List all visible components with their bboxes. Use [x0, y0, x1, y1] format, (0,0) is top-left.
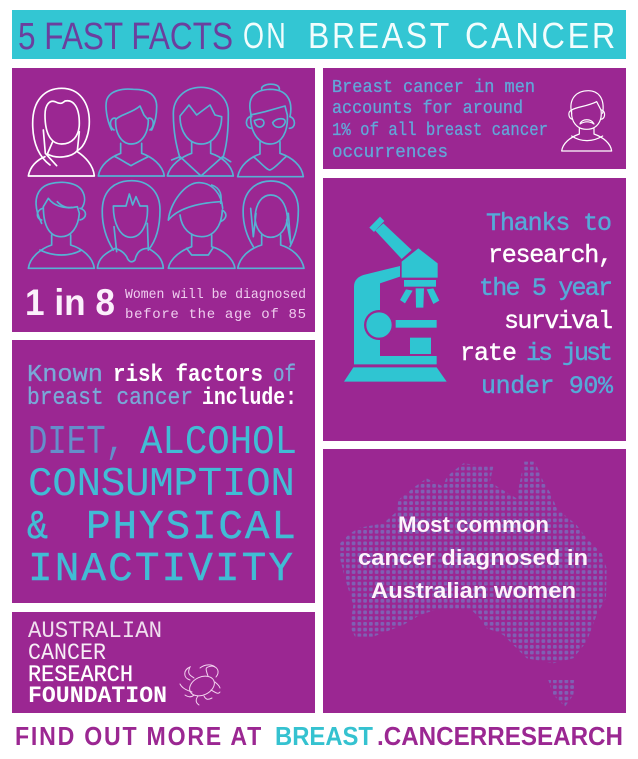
logo wordmark: CANCER [28, 640, 106, 666]
logo wordmark: RESEARCH [28, 662, 133, 688]
caption: women diagnosed [125, 287, 306, 323]
title: on breast cancer [243, 15, 618, 56]
text: survival rate: survival [504, 307, 613, 336]
logo wordmark: FOUNDATION [28, 683, 167, 709]
header banner [12, 10, 626, 59]
icon: microscope [344, 217, 447, 382]
list of risk factors [27, 420, 297, 593]
text: men statistic: occurrences [332, 143, 448, 163]
heading: known risk factors: include: [202, 385, 297, 412]
icon: woman 2 [98, 89, 164, 176]
icon: crab [180, 665, 220, 705]
map: dotted Australia [340, 462, 607, 706]
title: 5 fast facts: 5 FAST FACTS [18, 16, 233, 58]
text: men statistic: 1% of all breast cancer [332, 121, 548, 141]
title: on breast cancer: BREAST [308, 15, 452, 56]
list of risk factors: ALCOHOL [140, 420, 297, 466]
text: survival rate [460, 209, 614, 401]
text: men statistic [332, 78, 548, 163]
list of risk factors: CONSUMPTION [28, 462, 295, 508]
panel: foundation logo [12, 612, 315, 713]
heading: known risk factors [27, 362, 297, 412]
text: survival rate: Thanks to [486, 209, 612, 238]
icon: woman 3 [167, 87, 233, 176]
list of risk factors: PHYSICAL [86, 505, 296, 551]
text: most common cancer: Most common [398, 512, 549, 537]
heading: known risk factors: Known [27, 362, 103, 389]
footer: call to action [15, 721, 623, 751]
icon: woman 4 [238, 84, 303, 177]
heading: known risk factors: risk factors [113, 362, 263, 389]
text: survival rate: under 90% [481, 372, 614, 401]
panel: 1 in 8 women [12, 68, 315, 332]
footer: call to action: .CANCERRESEARCH [377, 721, 623, 751]
icon: woman 6 [97, 181, 163, 268]
panel: risk factors [12, 340, 315, 603]
text: survival rate: research, [488, 241, 613, 270]
icon: man with moustache [562, 91, 612, 151]
icon: row of women [28, 84, 304, 268]
logo wordmark [28, 618, 167, 709]
icon: woman 5 [28, 182, 94, 268]
list of risk factors: INACTIVITY [28, 547, 293, 593]
title: on breast cancer: ON [243, 15, 288, 56]
icon: woman 8 [238, 181, 304, 268]
stat: 1 in 8: 1 in 8 [25, 282, 115, 323]
caption: women diagnosed: before the age of 85 [125, 307, 306, 323]
title: on breast cancer: CANCER [465, 15, 618, 56]
icon: highlighted woman [28, 88, 94, 176]
logo wordmark: AUSTRALIAN [28, 618, 162, 644]
list of risk factors: & [27, 505, 48, 551]
text: survival rate: is just [526, 339, 613, 368]
text: men statistic: Breast cancer in men [332, 78, 535, 98]
text: survival rate: the 5 year [479, 274, 613, 303]
text: most common cancer [358, 512, 588, 603]
list of risk factors: DIET, [28, 420, 125, 466]
heading: known risk factors: of [273, 362, 296, 389]
footer: call to action: BREAST [275, 721, 373, 751]
panel: research survival [323, 178, 626, 441]
text: survival rate: rate [460, 339, 517, 368]
text: most common cancer: cancer diagnosed in [358, 545, 588, 570]
heading: known risk factors: breast cancer [27, 385, 193, 412]
panel: men [323, 68, 626, 169]
footer: call to action: FIND OUT MORE AT [15, 721, 263, 751]
text: men statistic: accounts for around [332, 99, 523, 119]
caption: women diagnosed: Women will be diagnosed [125, 287, 306, 303]
text: most common cancer: Australian women [371, 578, 576, 603]
icon: woman 7 [168, 183, 235, 268]
panel: most common cancer map [323, 449, 626, 713]
